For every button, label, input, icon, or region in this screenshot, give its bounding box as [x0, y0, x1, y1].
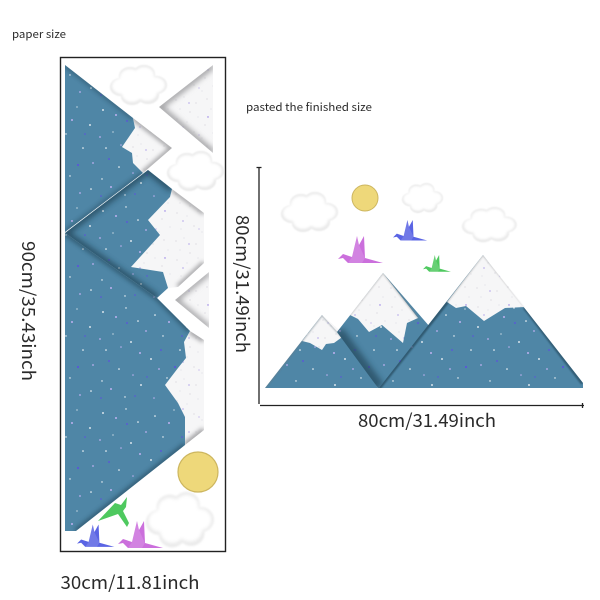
- cloud: [167, 151, 224, 191]
- icon: sun: [178, 452, 218, 492]
- third mountain snow: [165, 331, 204, 445]
- dimension: finished height: 80cm/31.49inch: [230, 215, 256, 353]
- small snow triangle: [175, 272, 209, 328]
- second mountain snow: [131, 189, 204, 288]
- dimension: paper height: 90cm/35.43inch: [16, 241, 42, 381]
- dimension: finished width: 80cm/31.49inch: [358, 407, 496, 433]
- icon: blue bird: [393, 220, 427, 241]
- icon: sun: [352, 185, 378, 211]
- dimension: paper width: 30cm/11.81inch: [60, 569, 200, 595]
- first mountain blue: [65, 65, 143, 232]
- middle mountain: [337, 273, 430, 388]
- cloud: [146, 492, 214, 547]
- first mountain snow: [122, 118, 172, 173]
- axis: height and width rule: [256, 167, 584, 408]
- icon: purple bird: [338, 236, 383, 263]
- icon: green bird: [98, 497, 129, 527]
- third mountain blue: [65, 233, 190, 531]
- paper size label: paper size: [12, 26, 66, 42]
- top-right snow triangle: [159, 65, 213, 153]
- panel: paper sheet: [60, 58, 226, 552]
- pasted size label: pasted the finished size: [246, 99, 372, 115]
- icon: purple bird: [118, 521, 163, 548]
- large mountain: [379, 255, 583, 388]
- cloud: [402, 183, 443, 213]
- cloud: [281, 192, 338, 232]
- cloud: [110, 65, 167, 105]
- panel: finished scene: [265, 183, 583, 388]
- cloud: [462, 207, 517, 242]
- icon: green bird: [423, 255, 451, 272]
- small mountain: [265, 315, 378, 388]
- icon: blue bird: [77, 524, 114, 547]
- second mountain blue: [65, 170, 172, 298]
